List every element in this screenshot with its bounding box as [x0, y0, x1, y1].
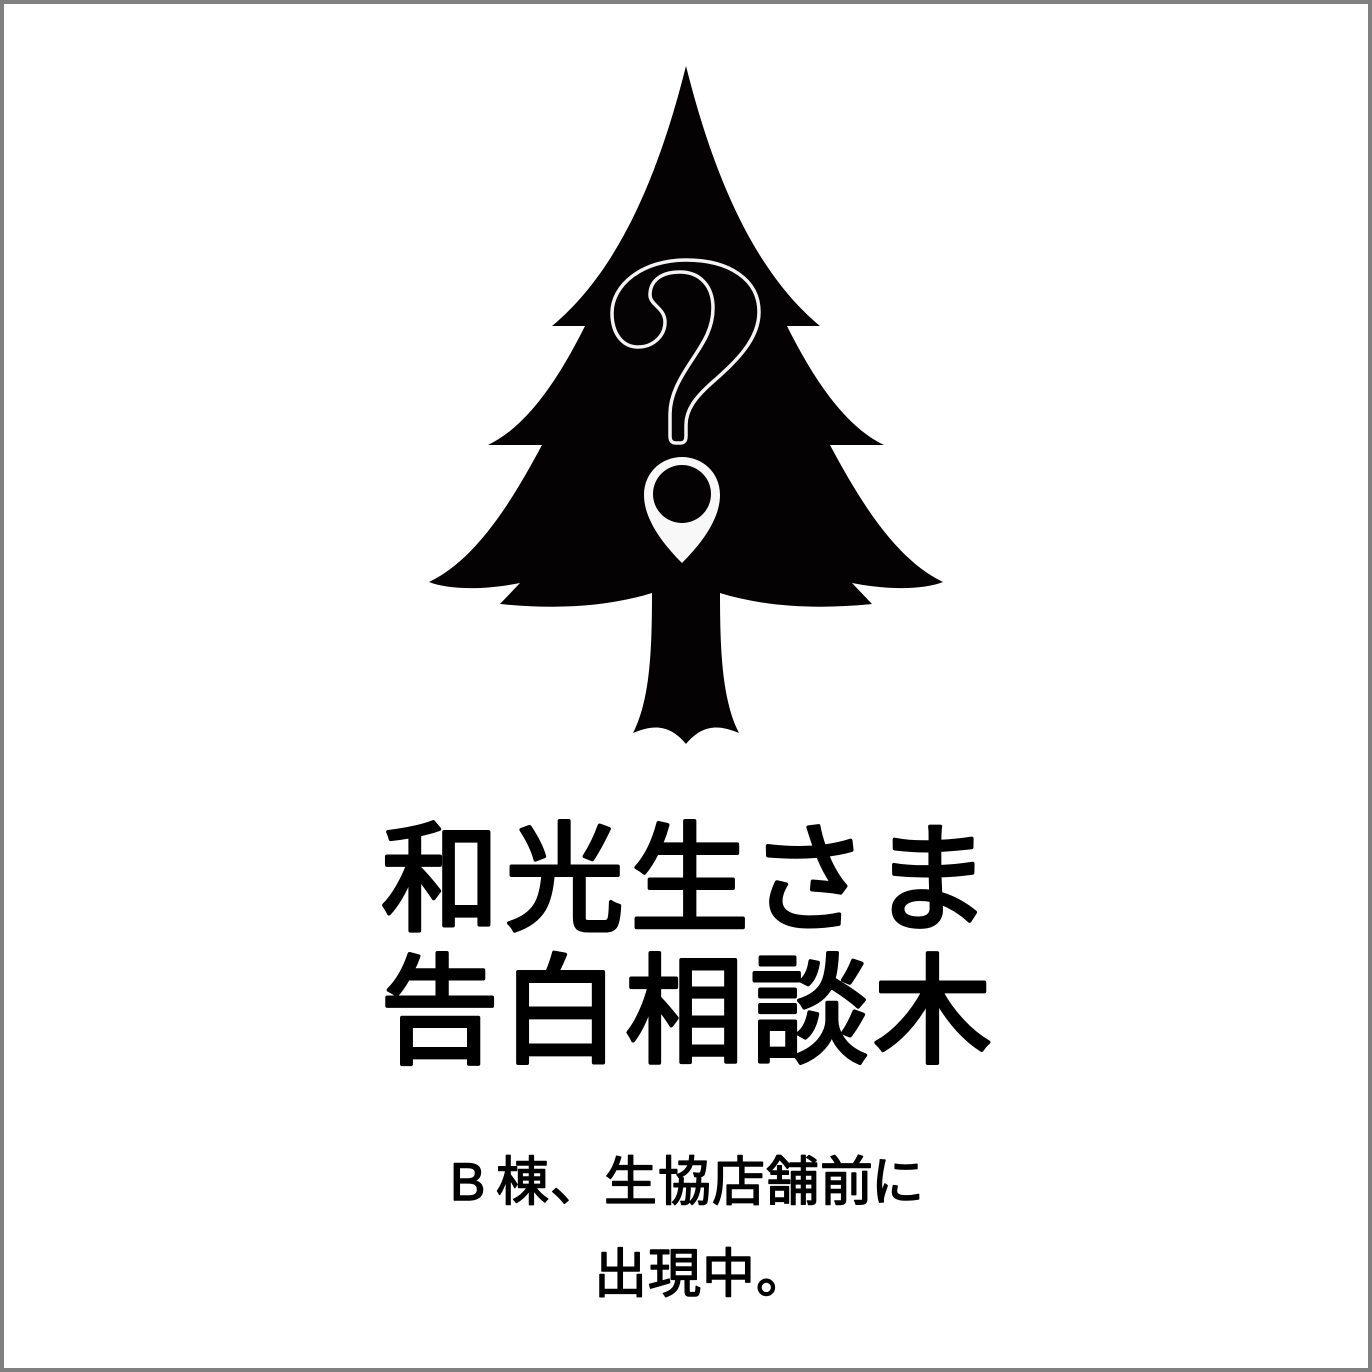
icon: tree with question mark and location pin: [429, 66, 943, 744]
location pin: [644, 457, 720, 563]
title line 2: 告白相談木: [380, 946, 992, 1079]
title line 1: 和光生さま: [381, 814, 991, 947]
question mark outline: [612, 260, 759, 443]
location text: [450, 1153, 924, 1304]
location line 2: 出現中。: [594, 1245, 809, 1304]
location line 1: B棟、生協店舗前に: [450, 1153, 924, 1212]
title: [380, 814, 992, 1079]
tree silhouette: [429, 66, 943, 744]
